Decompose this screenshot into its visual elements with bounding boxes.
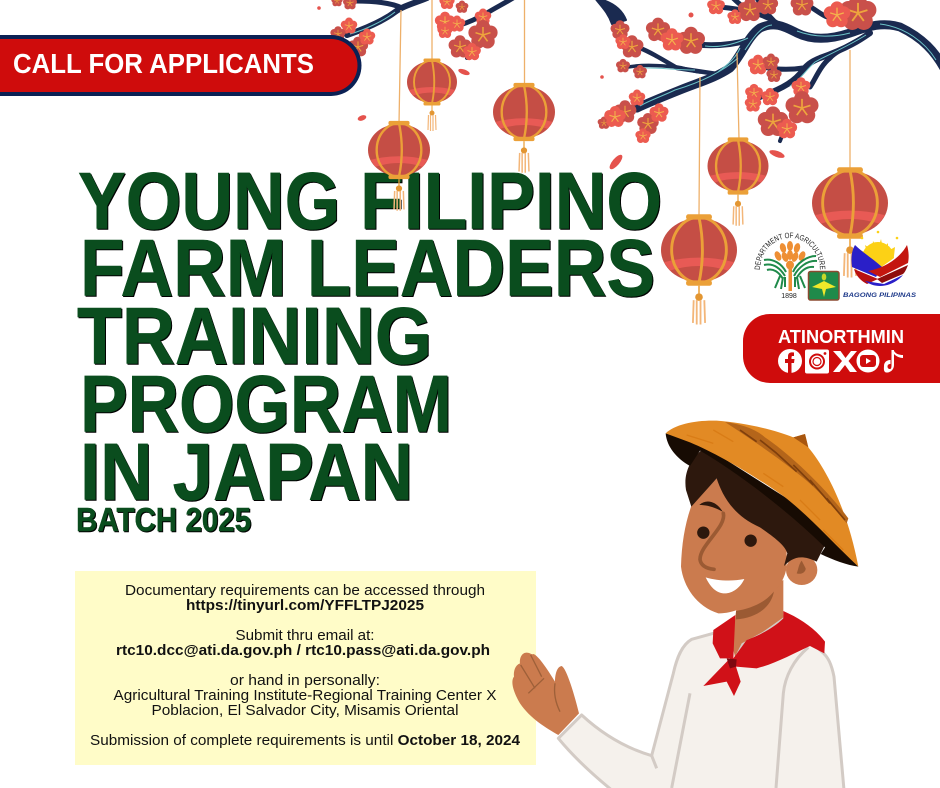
lantern strings — [399, 0, 850, 215]
cherry blossoms — [330, 0, 876, 143]
title: TRAINING — [77, 292, 432, 382]
title: BATCH 2025 — [76, 501, 251, 538]
logo: department of agriculture: DEPARTMENT OF AGRICULTURE — [754, 232, 826, 270]
banner: call for applicants: CALL FOR APPLICANTS — [13, 48, 314, 79]
social handle tab: ATINORTHMIN — [778, 326, 904, 347]
info panel: requirements and submission: https://tinyurl.com/YFFLTPJ2025 — [186, 597, 424, 614]
logo: bagong pilipinas: BAGONG PILIPINAS — [843, 292, 917, 299]
hair — [685, 450, 827, 566]
logo: bagong pilipinas — [843, 231, 917, 299]
eyebrow — [699, 502, 723, 512]
nose — [700, 513, 724, 569]
title — [76, 156, 662, 538]
logo: department of agriculture — [754, 232, 826, 300]
ear — [786, 555, 817, 585]
shirt folds — [652, 647, 808, 788]
info panel: requirements and submission: Poblacion, El Salvador City, Misamis Oriental — [152, 702, 459, 719]
neck — [732, 580, 783, 657]
lantern 6 — [812, 167, 888, 277]
banner: call for applicants — [0, 35, 361, 96]
cherry blossom branches — [347, 0, 940, 141]
lantern 2 — [407, 58, 457, 131]
info panel: requirements and submission — [75, 571, 536, 765]
smile — [706, 577, 744, 593]
icon: youtube — [856, 350, 880, 372]
title: PROGRAM — [80, 360, 452, 450]
social handle tab — [743, 314, 940, 383]
icon: tiktok — [884, 350, 903, 372]
hand — [512, 653, 579, 735]
title: YOUNG FILIPINO — [78, 156, 662, 246]
shirt — [558, 617, 844, 788]
lantern 3 — [493, 83, 555, 173]
eyes — [697, 526, 757, 547]
icon: x — [833, 351, 857, 372]
farmer character — [512, 421, 858, 788]
face — [681, 478, 787, 613]
lantern 1 — [368, 121, 430, 211]
scarf — [703, 611, 825, 696]
info panel: requirements and submission: Agricultural Training Institute-Regional Training Center X — [114, 687, 496, 704]
hat — [666, 421, 858, 567]
collar — [735, 617, 783, 657]
icon: facebook — [778, 349, 802, 373]
branch highlights — [350, 12, 936, 106]
info panel: requirements and submission: rtc10.dcc@ati.da.gov.ph / rtc10.pass@ati.da.gov.ph — [116, 642, 490, 659]
info panel: requirements and submission: or hand in personally: — [230, 672, 380, 689]
lantern 4 — [661, 214, 737, 324]
title: IN JAPAN — [80, 428, 413, 518]
info panel: requirements and submission: Submission of complete requirements is until October 18, 2024 — [90, 732, 521, 749]
falling petals — [317, 6, 786, 171]
logo: department of agriculture: 1898 — [781, 293, 797, 300]
hand creases — [521, 655, 560, 712]
lantern 5 — [708, 137, 768, 226]
neck shadow — [736, 591, 774, 619]
icon: instagram — [805, 350, 829, 374]
info panel: requirements and submission: Submit thru email at: — [236, 627, 374, 644]
scarf knot — [727, 658, 737, 668]
title: FARM LEADERS — [80, 224, 655, 314]
logo: green square emblem — [808, 272, 839, 300]
info panel: requirements and submission: Documentary requirements can be accessed through — [125, 582, 485, 599]
